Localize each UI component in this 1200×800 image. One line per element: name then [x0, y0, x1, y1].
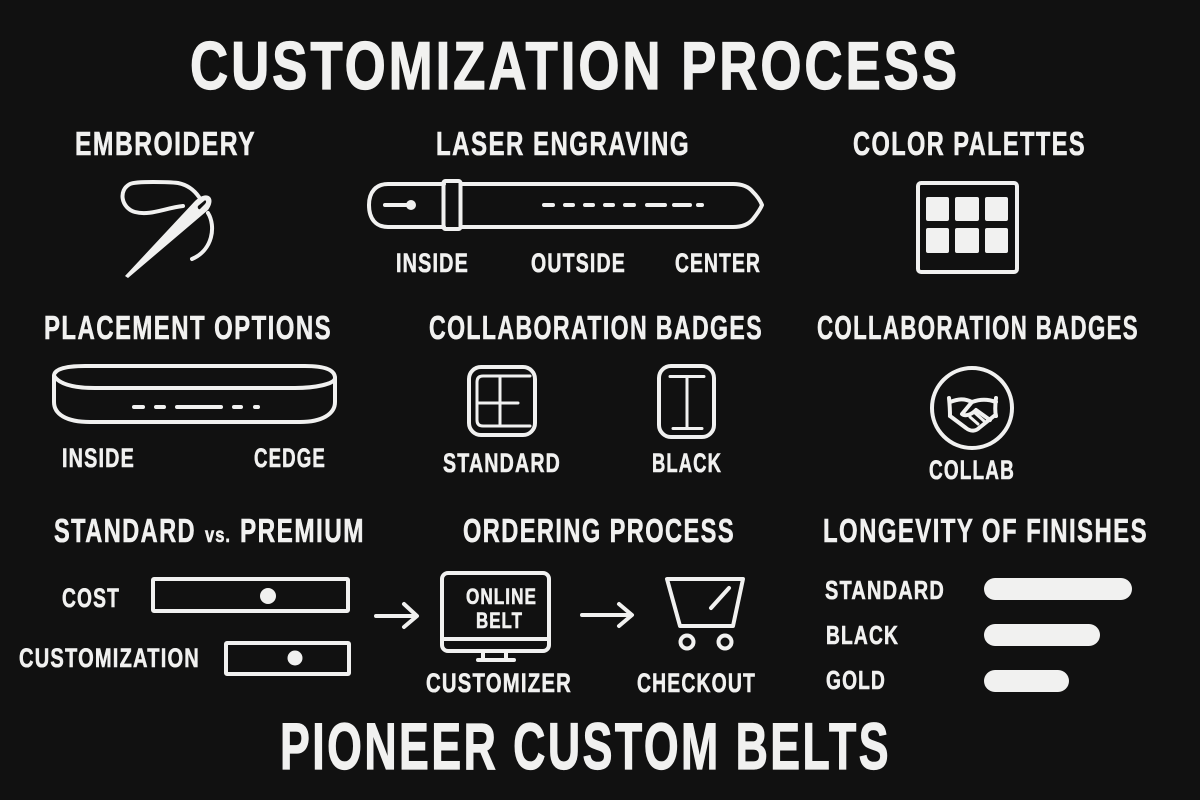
panel: placement options	[44, 309, 335, 473]
heading: ordering process: ORDERING PROCESS	[463, 512, 735, 549]
label: inside: INSIDE	[62, 443, 135, 473]
label: standard: STANDARD	[825, 575, 945, 605]
label: inside: INSIDE	[396, 248, 469, 278]
bar: standard	[984, 578, 1132, 600]
label: customizer: CUSTOMIZER	[426, 668, 572, 698]
label: collab: COLLAB	[929, 455, 1015, 485]
icon: black badge	[659, 366, 714, 437]
icon: belt loop	[54, 366, 335, 422]
label: outside: OUTSIDE	[531, 248, 626, 278]
label: checkout: CHECKOUT	[637, 668, 756, 698]
panel: collaboration badges, collab	[817, 309, 1139, 485]
label: gold: GOLD	[826, 665, 886, 695]
icon: belt	[369, 181, 762, 229]
heading: placement options: PLACEMENT OPTIONS	[44, 309, 332, 346]
icon: palette grid	[918, 183, 1017, 272]
icon: monitor: BELT	[476, 608, 523, 633]
panel: collaboration badges, standard and black	[429, 309, 763, 478]
icon: standard badge	[469, 367, 535, 435]
label: black: BLACK	[826, 620, 899, 650]
bar: black	[984, 624, 1100, 646]
slider: cost	[153, 579, 348, 611]
slider: customization	[226, 643, 349, 674]
heading: embroidery: EMBROIDERY	[75, 125, 256, 162]
heading: color palettes: COLOR PALETTES	[853, 125, 1086, 162]
heading: collaboration badges: COLLABORATION BADGES	[429, 309, 763, 346]
title: CUSTOMIZATION PROCESS	[190, 28, 960, 104]
icon: cart	[667, 579, 743, 648]
label: black: BLACK	[652, 448, 722, 478]
heading: standard vs premium	[54, 512, 365, 549]
panel: laser engraving	[369, 125, 762, 278]
bar: gold	[984, 670, 1069, 692]
label: customization: CUSTOMIZATION	[19, 643, 200, 673]
footer brand: PIONEER CUSTOM BELTS	[280, 709, 891, 783]
heading: standard vs premium: vs.	[205, 524, 231, 547]
heading: laser engraving: LASER ENGRAVING	[436, 125, 690, 162]
arrow: to checkout	[582, 604, 632, 626]
icon: handshake	[932, 368, 1012, 448]
label: cost: COST	[62, 583, 120, 613]
panel: longevity of finishes	[823, 512, 1148, 695]
arrow: to customizer	[376, 604, 417, 627]
label: cedge: CEDGE	[254, 443, 326, 473]
label: center: CENTER	[675, 248, 761, 278]
panel: color palettes	[853, 125, 1086, 272]
label: standard: STANDARD	[443, 448, 561, 478]
panel: standard vs premium	[19, 512, 365, 674]
icon: needle and thread	[123, 182, 212, 278]
heading: standard vs premium: STANDARD	[54, 512, 196, 549]
icon: monitor: ONLINE	[466, 584, 537, 609]
panel: ordering process	[426, 512, 756, 698]
panel: embroidery	[75, 125, 256, 278]
heading: standard vs premium: PREMIUM	[240, 512, 365, 549]
icon: monitor	[442, 573, 549, 660]
